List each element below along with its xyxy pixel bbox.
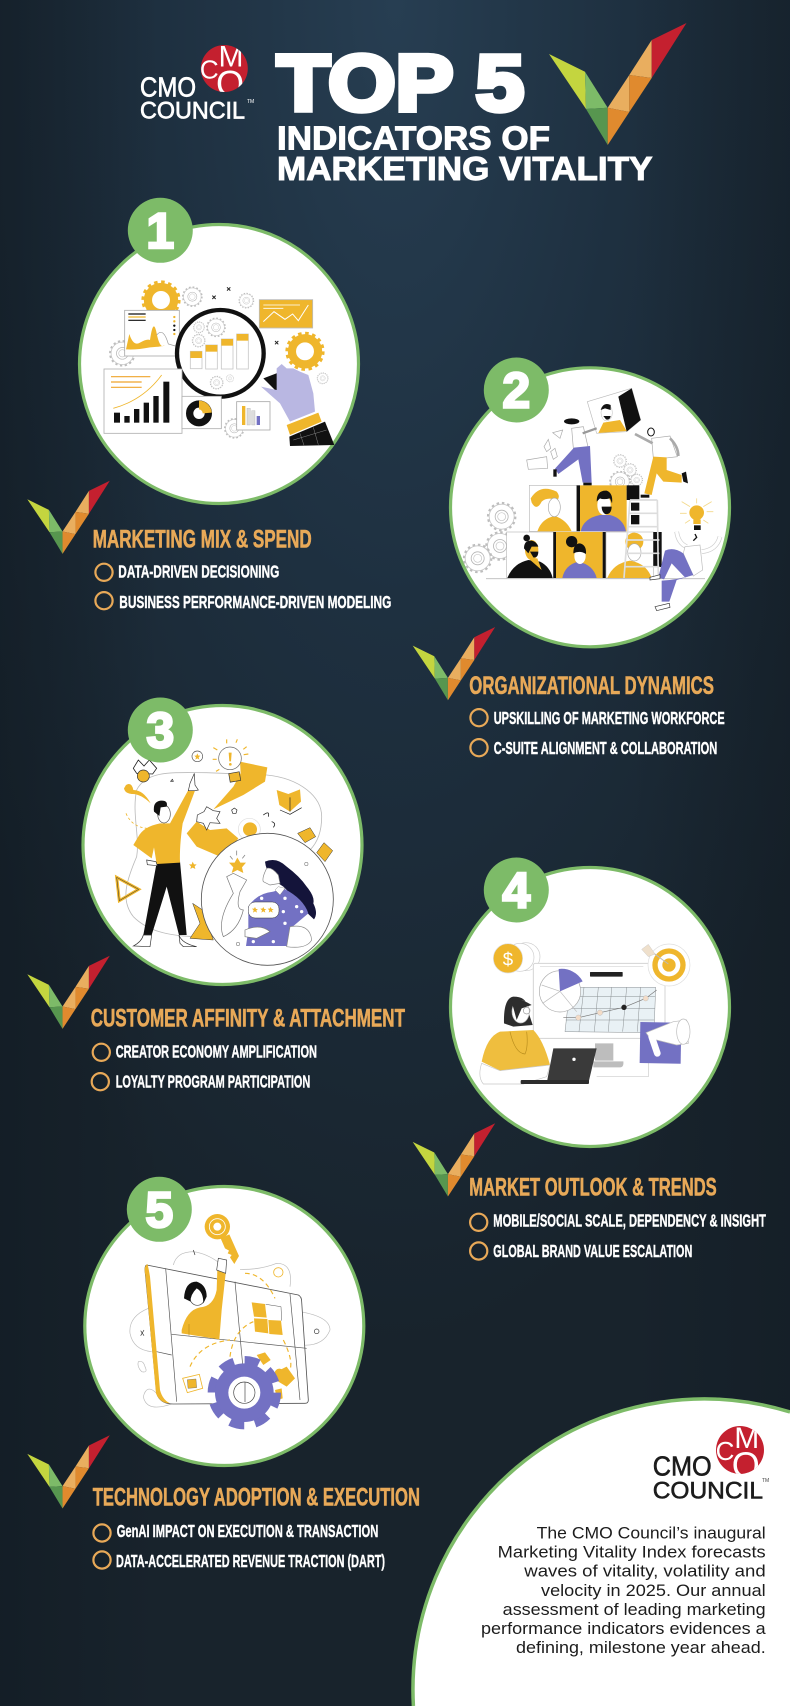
header: CMO Council logo: COUNCIL: [140, 97, 245, 124]
header: CMO Council logo: [140, 45, 254, 119]
title: [277, 38, 652, 188]
number badge 5: [127, 1177, 192, 1242]
bullet list 3: CREATOR ECONOMY AMPLIFICATION: [116, 1041, 317, 1061]
number badge 2: 2: [502, 362, 530, 418]
check mark 2: [413, 627, 495, 700]
bullet list 1: [95, 562, 391, 612]
heading: customer affinity and attachment: CUSTOMER AFFINITY & ATTACHMENT: [91, 1005, 405, 1033]
panel: indicator 1: [27, 198, 391, 612]
illustration circle 5: technology tablet: [85, 1186, 364, 1466]
header: CMO Council logo: M: [218, 40, 244, 74]
description text: velocity in 2025. Our annual: [541, 1581, 766, 1600]
description text: Marketing Vitality Index forecasts: [498, 1543, 766, 1562]
panel: about CMO Council: [413, 1399, 790, 1706]
panel: indicator 3: [27, 698, 405, 1092]
footer CMO Council logo: [654, 1426, 769, 1499]
panel: indicator 5: [27, 1177, 420, 1571]
bullet list 5: [93, 1521, 385, 1571]
check mark 3: [27, 956, 110, 1029]
header: CMO Council logo: CMO: [140, 72, 196, 103]
title: TOP 5: [277, 38, 524, 127]
illustration circle 4: market outlook dashboard: [450, 868, 730, 1146]
footer CMO Council logo: C: [716, 1436, 734, 1466]
bullet list 4: [470, 1211, 766, 1261]
check mark 5: [27, 1435, 110, 1508]
panel: indicator 4: [413, 858, 766, 1261]
header: CMO Council logo: O: [216, 63, 244, 104]
illustration circle 3: customer affinity: [83, 706, 362, 984]
footer CMO Council logo: COUNCIL: [653, 1477, 763, 1504]
number badge 4: [484, 858, 549, 922]
footer CMO Council logo: CMO: [653, 1451, 712, 1482]
description text: performance indicators evidences a: [481, 1619, 766, 1638]
bullet list 3: [92, 1041, 317, 1092]
footer CMO Council logo: O: [732, 1444, 760, 1486]
header: CMO Council logo: TM: [247, 99, 254, 105]
bullet list 1: DATA-DRIVEN DECISIONING: [118, 562, 279, 582]
number badge 4: 4: [502, 862, 530, 918]
illustration circle 4: market outlook dashboard: $: [503, 948, 514, 969]
description text: waves of vitality, volatility and: [523, 1562, 766, 1581]
title: INDICATORS OF: [277, 120, 550, 158]
check mark 1: [27, 481, 110, 554]
number badge 5: 5: [145, 1182, 173, 1238]
number badge 1: 1: [146, 203, 174, 259]
bullet list 1: BUSINESS PERFORMANCE-DRIVEN MODELING: [119, 592, 391, 612]
number badge 2: [484, 358, 549, 422]
footer CMO Council logo: TM: [762, 1478, 769, 1484]
check mark 4: [413, 1123, 495, 1196]
illustration circle 1: marketing analytics: [80, 224, 358, 504]
title: MARKETING VITALITY: [277, 151, 652, 188]
header: CMO Council logo: C: [200, 54, 219, 84]
white corner circle: [413, 1399, 790, 1706]
panel: indicator 2: [413, 358, 730, 758]
description text: assessment of leading marketing: [503, 1600, 766, 1619]
description text: [481, 1523, 766, 1657]
illustration circle 2: team building: [450, 368, 730, 647]
description text: The CMO Council’s inaugural: [537, 1523, 766, 1542]
heading: marketing mix and spend: MARKETING MIX & SPEND: [93, 525, 312, 553]
heading: technology adoption and execution: TECHNOLOGY ADOPTION & EXECUTION: [93, 1483, 420, 1511]
icon: large vitality check mark: [549, 23, 686, 145]
bullet list 2: [470, 708, 725, 758]
description text: defining, milestone year ahead.: [516, 1638, 766, 1657]
number badge 3: [128, 698, 193, 762]
footer CMO Council logo: M: [734, 1422, 759, 1455]
bullet list 3: LOYALTY PROGRAM PARTICIPATION: [116, 1072, 310, 1092]
number badge 1: [128, 198, 193, 263]
bullet list 5: DATA-ACCELERATED REVENUE TRACTION (DART): [116, 1551, 385, 1571]
number badge 3: 3: [146, 702, 174, 758]
bullet list 5: GenAI IMPACT ON EXECUTION & TRANSACTION: [117, 1521, 378, 1541]
